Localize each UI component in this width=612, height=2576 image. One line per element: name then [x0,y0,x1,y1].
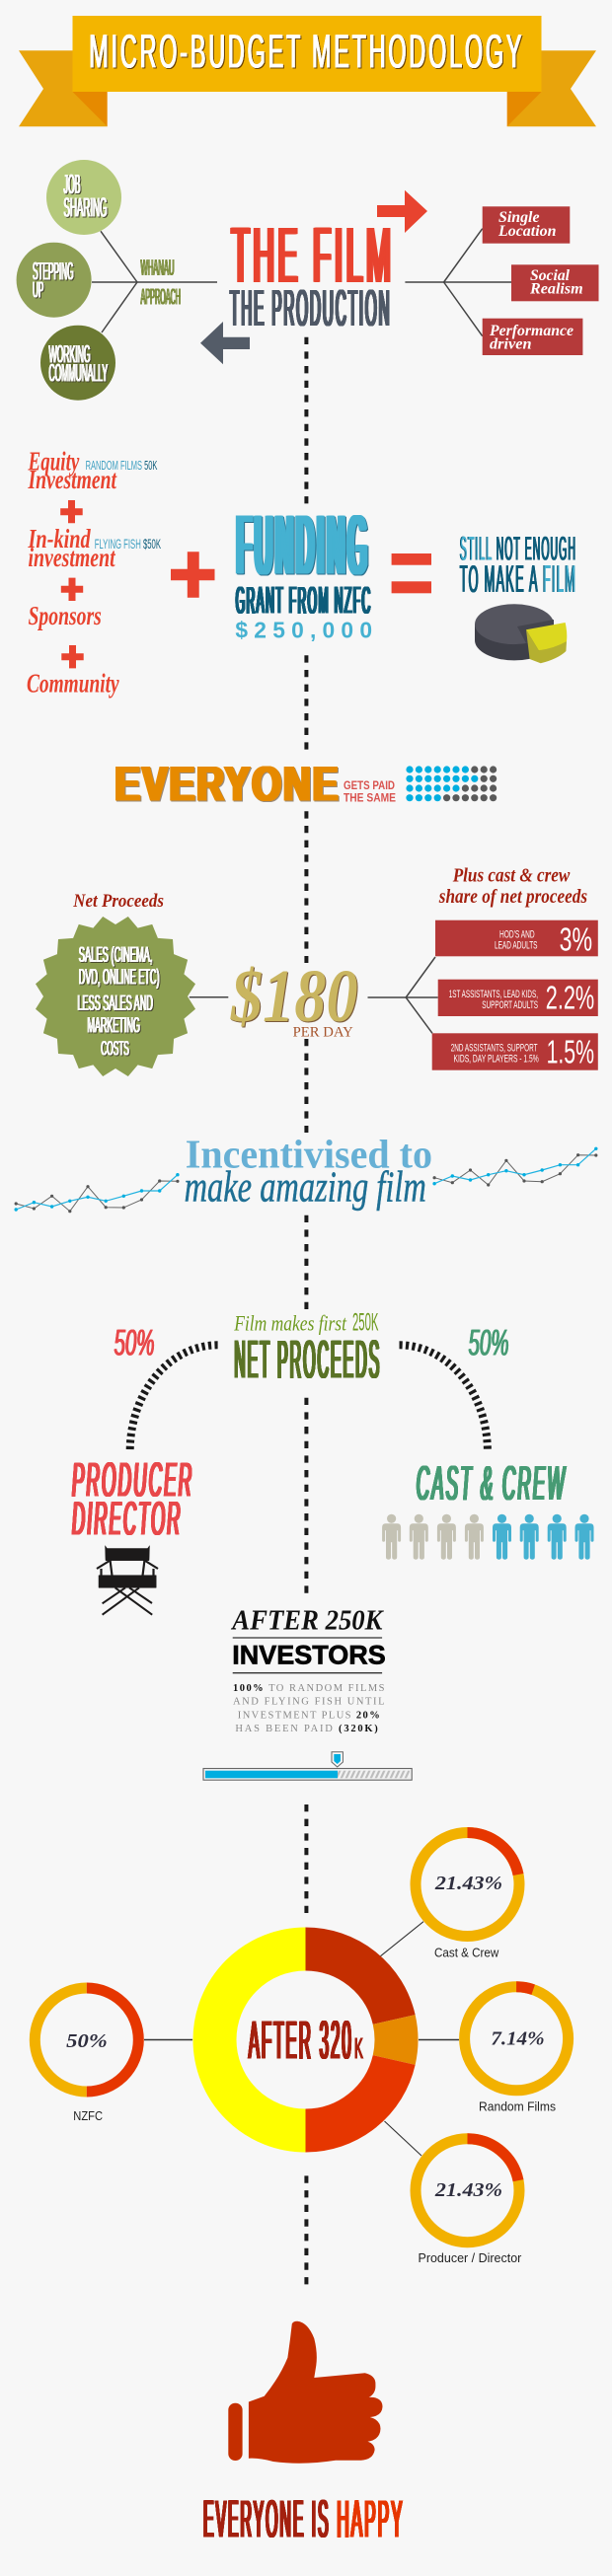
investor repayment text: HAS BEEN PAID (320K) [235,1724,378,1734]
arc: left dashed [130,1345,218,1451]
starburst: net proceeds: MARKETING [88,1013,140,1038]
donut: producer director [416,2139,522,2265]
line chart: left [15,1173,180,1213]
heading: incentivised to: Incentivised to [186,1131,432,1176]
text: AFTER 320 [250,2009,354,2070]
progress marker [332,1752,343,1767]
donut: nzfc [35,1988,138,2123]
plus cast and crew heading: Plus cast & crew [452,865,571,886]
icon: big plus [171,552,215,598]
progress bar [203,1752,412,1780]
donut: producer director: Producer / Director [419,2250,522,2265]
share box: hods [435,920,598,957]
text: COMMUNALLY [49,360,109,388]
funding sources list: Equity [28,447,80,477]
donut: nzfc: 50% [66,2030,108,2052]
starburst: net proceeds: DVD, ONLINE ETC) [79,965,160,990]
text: WHANAU [141,255,175,280]
tag: single location: Single [498,209,539,226]
text: APPROACH [141,283,182,309]
investor repayment text: 100% TO RANDOM FILMS [233,1683,385,1694]
donut: random films [465,1987,569,2113]
icon: equals [392,553,431,593]
donut: cast and crew: Cast & Crew [434,1945,499,1959]
producer director label [73,1453,194,1546]
people row: cast and crew [382,1514,594,1560]
arc: right dashed [399,1345,488,1451]
circle: working communally: WORKING [49,340,91,368]
funding sources list: Community [27,669,119,699]
circle: working communally [40,326,115,401]
icon: plus [61,645,84,668]
share box: 1st assistants: 1ST ASSISTANTS, LEAD KIDS, [449,989,538,1000]
net proceeds label: Net Proceeds [72,891,164,912]
icon: plus [60,500,83,523]
donut: cast and crew [416,1833,519,1959]
share box: 2nd assistants [432,1033,598,1070]
tag: social realism: Social [530,267,571,284]
gets paid the same: GETS PAID [344,778,395,792]
tag: performance driven [483,319,582,355]
text: STEPPING [34,258,74,285]
after 250k heading: AFTER 250K [230,1606,385,1637]
grant amount: $250,000 [235,618,372,643]
share box: 2nd assistants: 2ND ASSISTANTS, SUPPORT [451,1042,538,1054]
circle: job sharing: JOB [64,169,81,199]
share box: 2nd assistants: KIDS, DAY PLAYERS - 1.5% [454,1054,539,1066]
funding sources list [27,447,161,699]
tag: single location: Location [497,223,557,240]
investor repayment text: INVESTMENT PLUS 20% [238,1710,380,1721]
percent: cast share: 50% [469,1322,509,1362]
film connector lines [405,229,511,336]
after 320k label [250,2009,364,2070]
text: SHARING [64,191,108,222]
whanau approach connector lines [92,231,217,332]
share box: hods: LEAD ADULTS [495,940,537,952]
tag: single location [483,206,570,244]
dot grid [406,766,497,801]
tag: performance driven: driven [490,335,532,352]
arrow: grey left [200,322,250,364]
tag: social realism [511,264,598,301]
donut: random films: 7.14% [491,2028,545,2050]
funding sources list: In-kind [28,524,91,553]
whanau approach label [141,255,182,309]
icon: 3d pie chart [475,604,567,663]
plus cast and crew heading: share of net proceeds [438,887,587,908]
funding sources list: FLYING FISH $50K [95,537,161,552]
gets paid the same: THE SAME [344,790,396,804]
icon: director chair [97,1546,158,1615]
gets paid the same [344,778,396,804]
text: 250K [352,1308,379,1336]
share box: hods: 3% [560,920,592,957]
funding sources list: Sponsors [28,601,102,630]
plus cast and crew heading [438,865,587,908]
funding sources list: Investment [28,465,117,494]
circle: job sharing [46,160,121,235]
heading: make amazing film: make amazing film [185,1163,426,1212]
closing line: everyone is happy [204,2490,406,2549]
starburst: net proceeds: LESS SALES AND [78,991,153,1015]
circle: stepping up [17,243,92,318]
arrow: red right [377,190,427,233]
dashed central timeline [304,337,308,2285]
donut: producer director: 21.43% [434,2179,502,2201]
investors heading: INVESTORS [232,1641,386,1670]
starburst: net proceeds: COSTS [102,1037,129,1060]
text: PRODUCER [73,1453,194,1508]
share connector lines [367,957,438,1033]
investor repayment text [233,1683,385,1734]
still not enough text [460,530,576,601]
donut: cast and crew: 21.43% [434,1873,502,1894]
daily pay amount: $180 [230,955,358,1038]
tag: performance driven: Performance [489,323,574,339]
line chart: right [432,1147,598,1187]
share box: 1st assistants [438,980,598,1016]
icon: plus [61,578,83,601]
text: K [355,2030,364,2066]
donut connector lines [144,1922,459,2156]
title ribbon banner [19,16,596,126]
per day: PER DAY [293,1025,353,1041]
heading: everyone: EVERYONE [115,757,340,812]
circle: stepping up: UP [34,277,44,303]
investor repayment text: AND FLYING FISH UNTIL [233,1697,385,1708]
text: HAPPY [338,2490,406,2549]
starburst: net proceeds [36,917,195,1076]
donut: nzfc: NZFC [73,2108,103,2123]
funding sources list: investment [28,543,116,572]
starburst: net proceeds: SALES (CINEMA, [79,942,153,967]
film makes first 250k: Film makes first [233,1310,347,1335]
percent: producer share: 50% [115,1322,155,1362]
main donut chart [215,1950,397,2131]
connector line to $180 [190,996,228,998]
funding sources list: RANDOM FILMS 50K [86,458,158,473]
donut: random films: Random Films [479,2099,556,2113]
rule lines around investors [233,1638,382,1673]
tag: social realism: Realism [529,281,583,298]
share box: hods: HOD'S AND [499,929,535,941]
share box: 1st assistants: SUPPORT ADULTS [482,999,538,1011]
icon: thumbs up [228,2321,383,2464]
text: DIRECTOR [73,1493,184,1546]
